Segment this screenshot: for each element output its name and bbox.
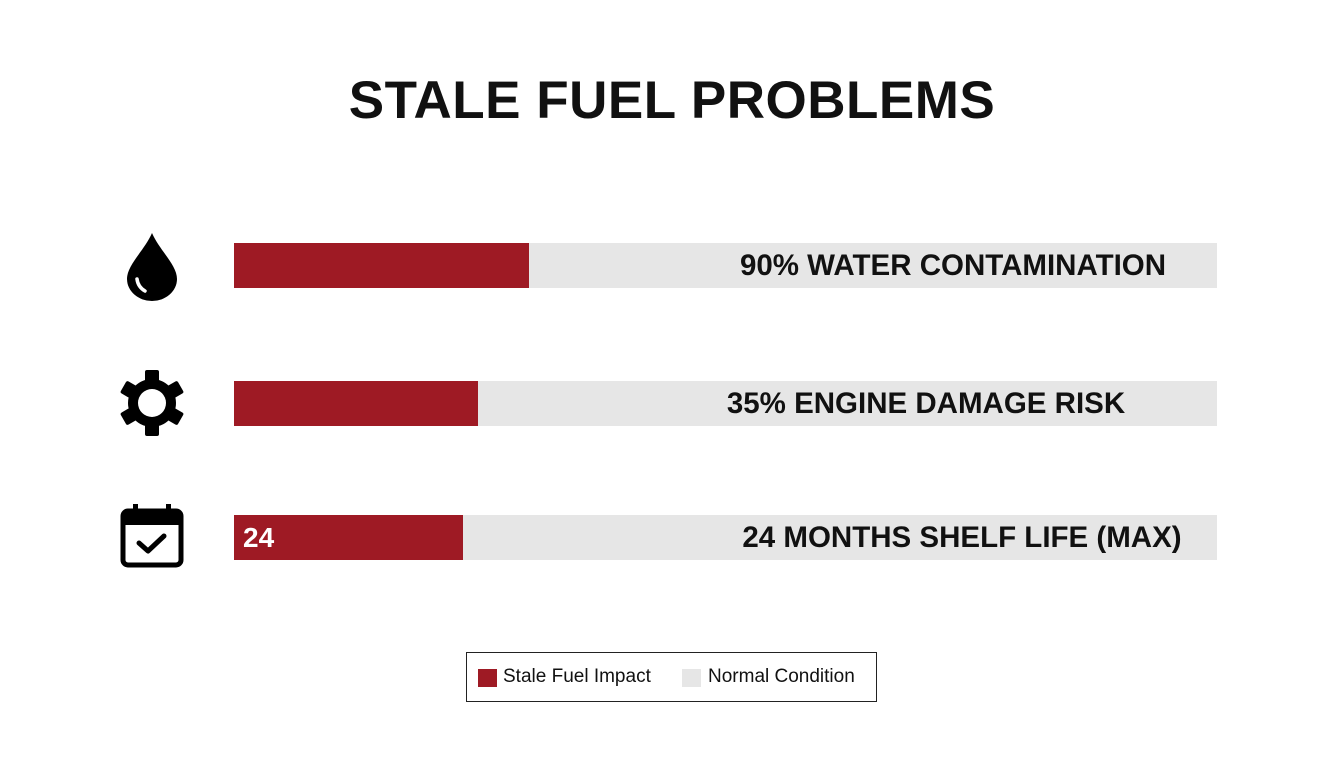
icon: gear (120, 370, 184, 436)
bar: shelf life: 24 (243, 522, 274, 553)
bar: water contamination (234, 243, 1217, 288)
icon: calendar (120, 504, 184, 568)
bar: engine damage: 35% ENGINE DAMAGE RISK (727, 387, 1125, 420)
bar: engine damage (234, 381, 1217, 426)
bar: water contamination: 90% WATER CONTAMINATION (740, 249, 1166, 282)
title: STALE FUEL PROBLEMS (349, 71, 995, 130)
legend: Normal Condition (708, 666, 855, 687)
bar: shelf life: 24 MONTHS SHELF LIFE (MAX) (742, 521, 1182, 554)
legend: Stale Fuel Impact (503, 666, 651, 687)
bar: shelf life (234, 515, 1217, 560)
legend (466, 652, 877, 702)
icon: water drop (127, 233, 177, 301)
